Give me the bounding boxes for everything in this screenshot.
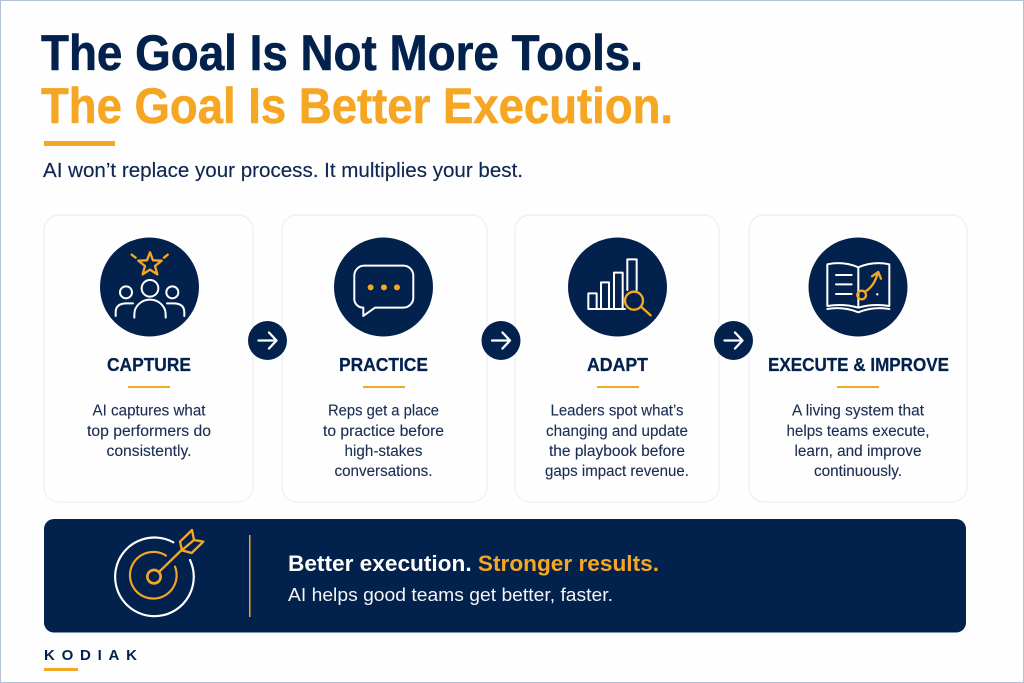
panel: practice xyxy=(282,215,487,502)
text: practice xyxy=(323,402,444,480)
text: adapt xyxy=(545,402,689,480)
arrow: practice to adapt xyxy=(482,321,520,360)
text: capture xyxy=(87,402,211,460)
rule xyxy=(363,386,405,388)
text: execute and improve: helps teams execute, xyxy=(786,423,930,440)
panel: capture xyxy=(44,215,253,502)
text: practice: Reps get a place xyxy=(328,402,439,420)
panel: adapt xyxy=(515,215,719,502)
text: execute and improve xyxy=(786,402,930,480)
title: The Goal Is Not More Tools. xyxy=(41,25,643,81)
icon: team with star xyxy=(100,238,199,336)
panel: execute and improve xyxy=(749,215,967,502)
text: execute and improve: A living system that xyxy=(792,402,925,420)
text: execute and improve: learn, and improve xyxy=(794,443,922,460)
rule xyxy=(597,386,639,388)
heading: execute and improve: EXECUTE & IMPROVE xyxy=(768,354,949,375)
text: capture: AI captures what xyxy=(92,402,206,420)
arrow: adapt to execute xyxy=(714,321,753,360)
panel: results banner xyxy=(44,519,966,632)
subtitle: AI won’t replace your process. It multiplies your best. xyxy=(43,160,523,182)
icon: speech bubble xyxy=(334,238,433,336)
icon: target with arrow xyxy=(115,530,203,616)
arrow: capture to practice xyxy=(248,321,287,360)
text: adapt: gaps impact revenue. xyxy=(545,463,689,480)
text: practice: high-stakes xyxy=(344,443,423,460)
icon: open book with growth arrow xyxy=(808,238,908,336)
text: practice: to practice before xyxy=(323,423,444,440)
banner headline: Better execution. Stronger results. xyxy=(288,551,659,576)
icon: bar chart with magnifier xyxy=(568,238,667,336)
title underline xyxy=(44,141,115,146)
text: capture: consistently. xyxy=(106,443,192,460)
text: execute and improve: continuously. xyxy=(814,463,902,480)
text: adapt: Leaders spot what’s xyxy=(550,402,684,420)
heading: capture: CAPTURE xyxy=(107,354,191,375)
divider xyxy=(249,535,250,617)
rule xyxy=(128,386,170,388)
title: The Goal Is Better Execution. xyxy=(41,78,673,134)
heading: practice: PRACTICE xyxy=(339,354,428,375)
logo: kodiak: KODIAK xyxy=(44,647,137,664)
heading: adapt: ADAPT xyxy=(587,354,649,375)
title xyxy=(41,25,673,134)
rule xyxy=(837,386,879,388)
text: capture: top performers do xyxy=(87,423,211,440)
text: adapt: the playbook before xyxy=(549,443,685,460)
text: practice: conversations. xyxy=(334,463,432,480)
banner subtext: AI helps good teams get better, faster. xyxy=(288,585,613,605)
text: adapt: changing and update xyxy=(546,423,688,440)
